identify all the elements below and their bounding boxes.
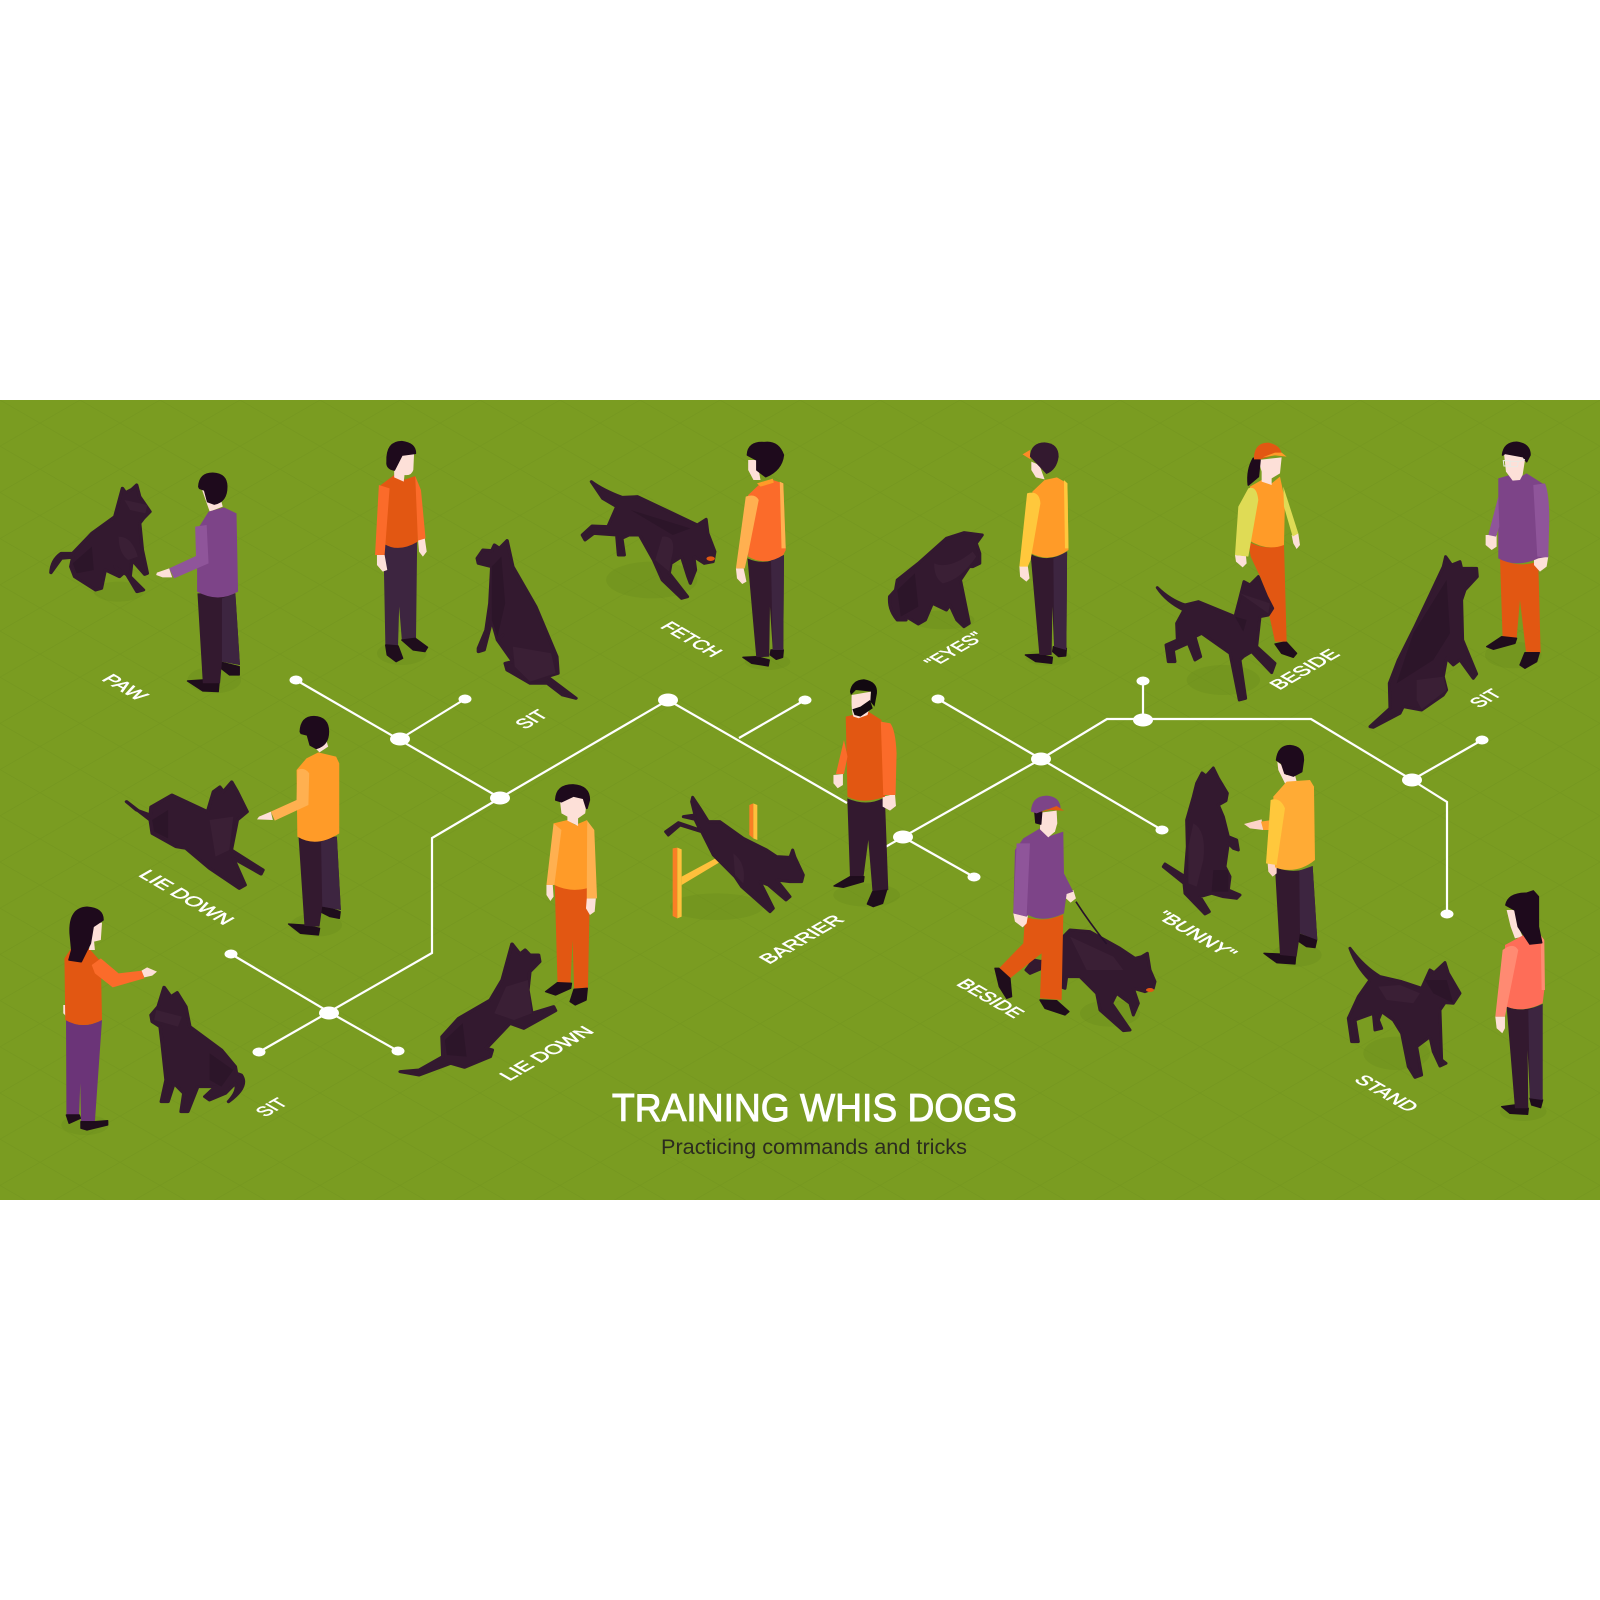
person: man in purple shirt giving paw	[156, 473, 241, 693]
labels on the ground: BESIDE	[1265, 647, 1345, 693]
person: man in orange shirt and orange trousers	[546, 785, 597, 1005]
labels on the ground: BESIDE	[951, 976, 1028, 1021]
dog: bunny pose	[1163, 768, 1240, 914]
dog: sit	[477, 541, 576, 698]
labels on the ground: LIE DOWN	[133, 867, 238, 928]
labels on the ground: "EYES"	[920, 629, 990, 670]
labels on the ground: PAW	[96, 672, 152, 704]
dog: fetch	[582, 482, 715, 598]
person: man with glasses, purple shirt, orange trousers	[1485, 442, 1549, 668]
dog: sit, right	[1370, 557, 1477, 727]
person: woman in coral shirt	[1495, 891, 1547, 1121]
labels on the ground: BARRIER	[755, 912, 849, 967]
person: woman with long hair, orange-red shirt, purple trousers	[61, 907, 157, 1135]
dog: stand	[1348, 948, 1460, 1077]
flowchart connector lines and nodes	[224, 676, 1488, 1056]
labels on the ground: "BUNNY"	[1150, 908, 1241, 961]
person: back view with orange cap and yellow sleeves	[1019, 442, 1071, 666]
labels on the ground	[96, 619, 1507, 1120]
labels on the ground: SIT	[1466, 687, 1507, 711]
green isometric ground panel	[0, 400, 1600, 1200]
dog: lie down, left	[127, 782, 263, 888]
person: woman with bun, orange shirt	[736, 442, 790, 670]
person: man in orange shirt, lie down	[257, 717, 342, 937]
dog: eyes, paw over face	[889, 533, 982, 629]
barrier hurdle	[670, 803, 763, 920]
labels on the ground: FETCH	[655, 619, 726, 660]
labels on the ground: STAND	[1349, 1072, 1423, 1115]
subtitle: Practicing commands and tricks	[661, 1136, 967, 1159]
person: man in purple cap walking the dog on a leash	[995, 796, 1107, 1015]
person: trainer in orange-red shirt, front view	[375, 442, 427, 665]
person and dog: woman with orange cap and dog walking beside	[1157, 443, 1300, 700]
labels on the ground: SIT	[252, 1096, 293, 1120]
labels on the ground: SIT	[511, 707, 554, 732]
dog: paw	[51, 485, 150, 602]
person: man in orange shirt offering hand, bunny	[1244, 746, 1322, 967]
title: TRAINING WHIS DOGS	[612, 1087, 1017, 1130]
dog: sit, bottom left	[151, 987, 243, 1112]
dog: beside, with leash	[1026, 930, 1155, 1031]
dog: jumping over barrier	[666, 797, 803, 912]
labels on the ground: LIE DOWN	[495, 1024, 599, 1084]
dog: lie down, front of orange man	[400, 944, 556, 1075]
person: bearded man with orange shirt, centre	[833, 679, 900, 907]
